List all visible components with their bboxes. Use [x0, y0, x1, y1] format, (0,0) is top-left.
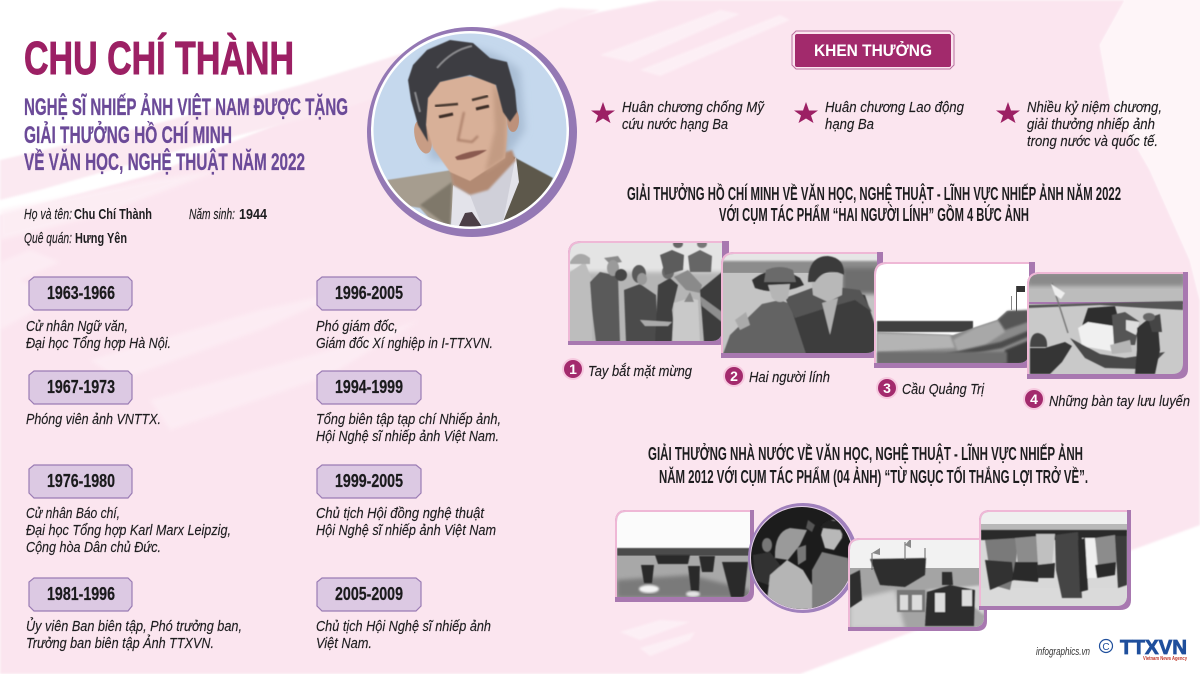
photo 3 [874, 262, 1035, 368]
timeline entry 1967-1973: Phóng viên ảnh VNTTX. [26, 411, 161, 428]
timeline entry 2005-2009: Chủ tịch Hội Nghệ sĩ nhiếp ảnh [316, 618, 491, 635]
timeline entry 1967-1973: 1967-1973 [47, 377, 115, 397]
caption 4: 4 [1030, 391, 1038, 407]
timeline entry 1981-1996: Trưởng ban biên tập Ảnh TTXVN. [26, 634, 214, 652]
award: Huân chương Lao động [794, 99, 965, 133]
award: Huân chương Lao động: hạng Ba [825, 116, 874, 133]
award: Nhiều kỷ niệm chương: giải thưởng nhiếp ảnh [1027, 116, 1155, 133]
timeline entry 1963-1966 [26, 277, 171, 352]
subtitle: GIẢI THƯỞNG HỒ CHÍ MINH [24, 120, 232, 149]
caption 2: Hai người lính [749, 369, 830, 386]
timeline entry 1981-1996 [26, 578, 242, 652]
jacket left [387, 170, 455, 224]
personal info: Quê quán: [24, 230, 72, 247]
brows, eyes [435, 96, 488, 106]
subtitle: VỀ VĂN HỌC, NGHỆ THUẬT NĂM 2022 [24, 148, 305, 176]
personal info: Hưng Yên [75, 230, 127, 247]
subtitle: NGHỆ SĨ NHIẾP ẢNH VIỆT NAM ĐƯỢC TẶNG [24, 92, 348, 121]
caption 1 [562, 358, 693, 380]
TTXVN logo: TTXVN [1120, 637, 1187, 659]
photo 2 [721, 252, 883, 358]
timeline entry 2005-2009: 2005-2009 [335, 584, 403, 604]
timeline entry 1976-1980: Cộng hòa Dân chủ Đức. [26, 539, 161, 556]
timeline entry 1996-2005 [316, 277, 493, 352]
personal info: Năm sinh: [189, 206, 235, 223]
photo c [848, 538, 988, 631]
award: Huân chương chống Mỹ: Huân chương chống Mỹ [622, 99, 765, 116]
source credit: C [1102, 642, 1110, 653]
title: CHU CHÍ THÀNH [24, 32, 294, 84]
caption 1: 1 [569, 361, 577, 377]
personal info: 1944 [239, 206, 268, 223]
award: Huân chương Lao động: Huân chương Lao động [825, 99, 965, 116]
face [425, 76, 507, 181]
subtitle [24, 92, 348, 176]
timeline entry 1994-1999 [316, 371, 501, 445]
timeline entry 1976-1980: Cử nhân Báo chí, [26, 505, 120, 522]
timeline entry 1976-1980 [26, 465, 231, 556]
neck [450, 150, 516, 195]
award: Nhiều kỷ niệm chương: trong nước và quốc tế. [1027, 133, 1158, 150]
timeline entry 1963-1966: Cử nhân Ngữ văn, [26, 318, 128, 335]
timeline entry 1981-1996: 1981-1996 [47, 584, 115, 604]
caption 3 [876, 377, 985, 399]
caption 2: 2 [730, 368, 738, 384]
photo 1 [568, 240, 729, 345]
ears [414, 121, 432, 154]
timeline entry 2005-2009 [316, 578, 491, 652]
hair [408, 40, 517, 142]
personal info: Chu Chí Thành [74, 206, 152, 223]
photo 4 [1027, 272, 1188, 379]
timeline entry 1999-2005: Hội Nghệ sĩ nhiếp ảnh Việt Nam [316, 522, 496, 539]
timeline entry 1996-2005: Giám đốc Xí nghiệp in I-TTXVN. [316, 335, 493, 352]
photo b circular [748, 503, 858, 613]
timeline entry 1996-2005: 1996-2005 [335, 283, 403, 303]
timeline entry 1976-1980: 1976-1980 [47, 471, 115, 491]
jacket right [500, 155, 553, 225]
timeline entry 1994-1999: Tổng biên tập tạp chí Nhiếp ảnh, [316, 411, 501, 428]
timeline entry 1994-1999: 1994-1999 [335, 377, 403, 397]
tie [459, 212, 482, 226]
timeline entry 1967-1973 [26, 371, 161, 428]
awards heading badge: KHEN THƯỞNG [814, 41, 932, 60]
timeline entry 2005-2009: Việt Nam. [316, 635, 372, 652]
photo a [615, 510, 755, 602]
award: Huân chương chống Mỹ: cứu nước hạng Ba [622, 116, 728, 133]
caption 4 [1023, 388, 1190, 410]
nose and mouth [458, 112, 478, 142]
State prize heading [648, 443, 1088, 487]
caption 3: Cầu Quảng Trị [902, 381, 985, 398]
timeline entry 1999-2005: Chủ tịch Hội đồng nghệ thuật [316, 505, 485, 522]
caption 2 [723, 365, 830, 387]
timeline entry 1981-1996: Ủy viên Ban biên tập, Phó trưởng ban, [26, 617, 242, 635]
award: Huân chương chống Mỹ [591, 99, 765, 133]
awards heading badge [792, 31, 954, 69]
caption 1: Tay bắt mặt mừng [588, 363, 693, 380]
portrait photo [367, 27, 577, 237]
award: Nhiều kỷ niệm chương [996, 99, 1162, 150]
timeline entry 1999-2005 [316, 465, 496, 539]
award: Nhiều kỷ niệm chương: Nhiều kỷ niệm chương, [1027, 99, 1162, 116]
timeline entry 1996-2005: Phó giám đốc, [316, 318, 398, 335]
caption 3: 3 [883, 380, 891, 396]
timeline entry 1963-1966: Đại học Tổng hợp Hà Nội. [26, 335, 171, 352]
timeline entry 1963-1966: 1963-1966 [47, 283, 115, 303]
timeline entry 1999-2005: 1999-2005 [335, 471, 403, 491]
shirt [451, 157, 519, 228]
timeline entry 1994-1999: Hội Nghệ sĩ nhiếp ảnh Việt Nam. [316, 428, 499, 445]
personal info: Họ và tên: [24, 206, 72, 223]
source credit: Vietnam News Agency [1143, 656, 1187, 662]
timeline entry 1976-1980: Đại học Tổng hợp Karl Marx Leipzig, [26, 522, 231, 539]
personal info [24, 206, 268, 247]
Ho Chi Minh prize heading [627, 183, 1121, 225]
photo d [979, 510, 1131, 610]
source credit [1036, 637, 1187, 662]
source credit: infographics.vn [1036, 646, 1090, 658]
